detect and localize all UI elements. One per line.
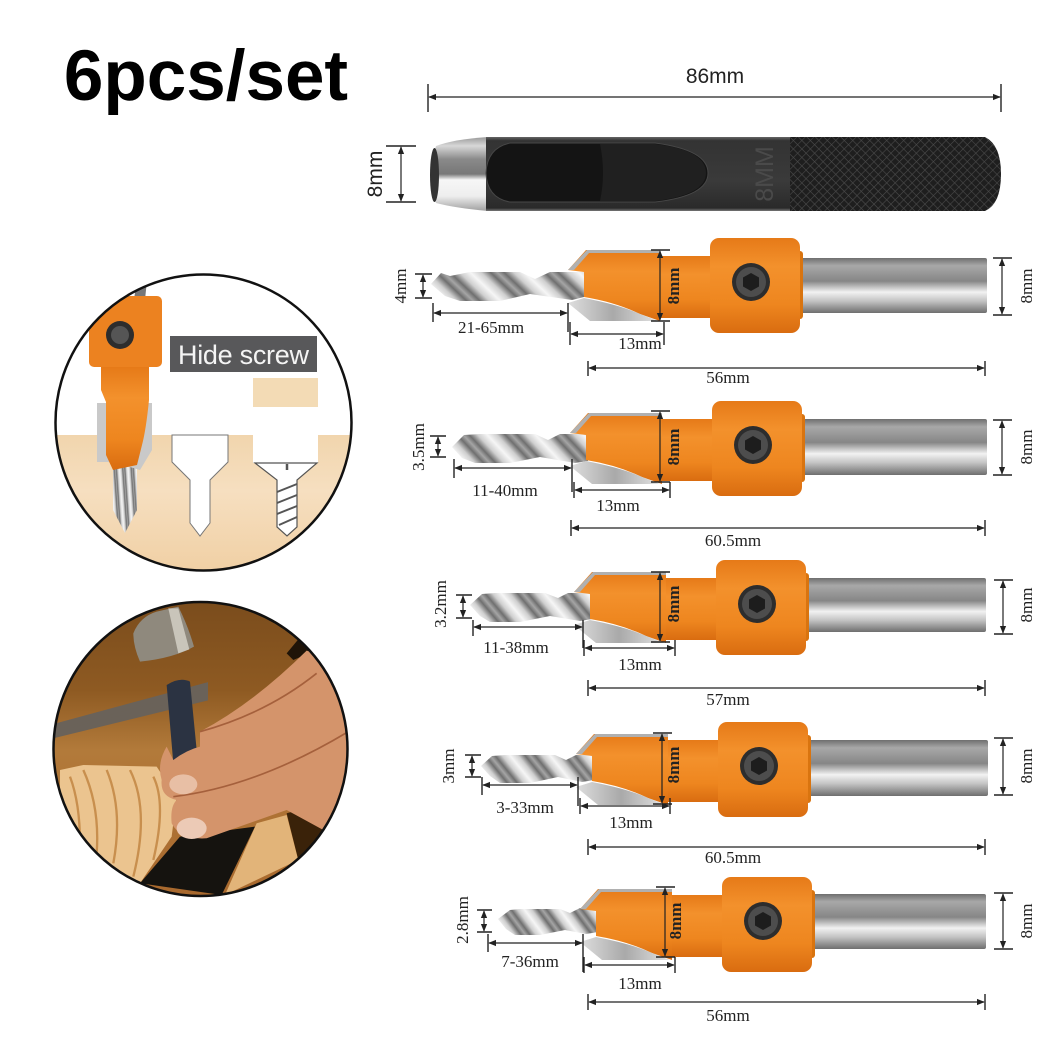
dimension: drill diameter 3mm xyxy=(439,749,481,783)
dimension: 13mm: 13mm xyxy=(596,496,640,515)
dimension: 8mm head xyxy=(651,250,683,321)
dimension: 8mm shank: 8mm xyxy=(1017,430,1036,464)
dimension: 13mm: 13mm xyxy=(618,974,662,993)
dimension: 3-33mm: 3-33mm xyxy=(496,798,554,817)
dimension: 11-40mm: 11-40mm xyxy=(472,481,538,500)
cutter head xyxy=(574,560,809,655)
dimension: 8mm head xyxy=(651,411,683,482)
dimension: 7-36mm: 7-36mm xyxy=(501,952,559,971)
photo background xyxy=(54,603,300,895)
wood board xyxy=(50,435,360,575)
countersink bit in use xyxy=(89,270,162,533)
punch knurled grip xyxy=(790,137,1001,211)
wood block xyxy=(60,765,177,883)
wood grain xyxy=(70,770,160,877)
label: hide screw: Hide screw xyxy=(178,340,310,370)
dimension: 13mm xyxy=(580,798,670,832)
dimension: 8mm shank: 8mm xyxy=(1017,904,1036,938)
hand xyxy=(160,651,348,838)
drill xyxy=(452,434,588,463)
dimension: drill diameter 4mm: 4mm xyxy=(391,269,410,303)
dimension: 21-65mm xyxy=(433,303,568,337)
dimension: 57mm: 57mm xyxy=(706,690,750,709)
bit 1: 4mm xyxy=(391,238,1036,387)
finger crease xyxy=(173,673,348,797)
dimension: 60.5mm xyxy=(571,520,985,550)
dimension: 3-33mm xyxy=(482,777,578,817)
punch shaft xyxy=(167,680,197,763)
countersunk hole xyxy=(172,435,228,536)
dimension: punch diameter 8mm xyxy=(364,146,416,202)
dimension: 13mm xyxy=(584,957,675,993)
cutter head xyxy=(576,722,811,817)
dimension: 8mm shank: 8mm xyxy=(1017,269,1036,303)
screw xyxy=(255,463,317,536)
panel: hide screw diagram xyxy=(50,270,360,575)
dimension: 13mm: 13mm xyxy=(609,813,653,832)
circle outline xyxy=(54,602,348,896)
cutter head xyxy=(580,877,815,972)
dimension: 56mm xyxy=(588,361,985,387)
wood plug xyxy=(253,378,318,407)
dimension: drill diameter 2.8mm xyxy=(453,896,492,944)
dimension: 8mm head: 8mm xyxy=(664,586,683,622)
punch tool with dimensions xyxy=(364,65,1001,211)
dimension: drill diameter 4mm xyxy=(391,269,432,303)
drill xyxy=(431,272,584,301)
dimension: 60.5mm xyxy=(588,839,985,867)
black base xyxy=(140,827,255,895)
bit 4: 3mm xyxy=(439,722,1036,867)
recess above screw xyxy=(253,434,318,463)
cutter head xyxy=(570,401,805,496)
panel: hammer and punch photo xyxy=(50,600,352,900)
shank xyxy=(805,578,986,632)
dimension: 8mm shank: 8mm xyxy=(1017,749,1036,783)
dimension: 8mm head xyxy=(653,733,683,804)
cutter head xyxy=(568,238,803,333)
dimension: 8mm shank: 8mm xyxy=(1017,588,1036,622)
dark gap xyxy=(286,812,322,858)
punch slot xyxy=(486,143,708,202)
dimension: 13mm: 13mm xyxy=(618,655,662,674)
dimension: 13mm xyxy=(574,482,670,515)
dimension: 8mm head xyxy=(656,887,685,957)
dimension: drill diameter 3.2mm: 3.2mm xyxy=(431,580,450,628)
dimension: punch diameter 8mm: 8mm xyxy=(364,151,387,197)
bit 3: 3.2mm xyxy=(431,560,1036,709)
right wood piece xyxy=(225,815,298,895)
dimension: 8mm shank xyxy=(994,580,1036,634)
dimension: 8mm head: 8mm xyxy=(664,747,683,783)
dimension: 60.5mm: 60.5mm xyxy=(705,531,761,550)
hammer highlight xyxy=(168,608,189,653)
dimension: 56mm xyxy=(588,994,985,1025)
dimension: 8mm shank xyxy=(994,893,1036,949)
shank xyxy=(801,258,987,313)
dimension: 8mm shank xyxy=(993,420,1036,475)
circle outline xyxy=(56,274,352,570)
dimension: drill diameter 3.2mm xyxy=(431,580,472,628)
dimension: 11-38mm xyxy=(473,620,583,657)
shank xyxy=(803,419,987,475)
title: 6pcs/set xyxy=(64,37,348,116)
dimension: drill diameter 3.5mm: 3.5mm xyxy=(409,423,428,471)
dimension: drill diameter 3.5mm xyxy=(409,423,446,471)
dimension: drill diameter 3mm: 3mm xyxy=(439,749,458,783)
dimension: 8mm shank xyxy=(993,258,1036,315)
shank xyxy=(805,740,988,796)
dimension: 8mm head: 8mm xyxy=(666,903,685,939)
fingernail index xyxy=(169,774,197,794)
dimension: 8mm head: 8mm xyxy=(664,429,683,465)
dimension: 13mm: 13mm xyxy=(618,334,662,353)
dimension: 21-65mm: 21-65mm xyxy=(458,318,524,337)
dimension: 60.5mm: 60.5mm xyxy=(705,848,761,867)
dimension: 56mm: 56mm xyxy=(706,1006,750,1025)
dimension: 8mm head: 8mm xyxy=(664,268,683,304)
punch black body xyxy=(486,137,792,211)
bit 5: 2.8mm xyxy=(453,877,1036,1025)
punch slot inner part xyxy=(600,144,706,201)
dimension: 86mm xyxy=(428,65,1001,112)
dimension: 11-40mm xyxy=(454,459,572,500)
dimension: 8mm head xyxy=(651,572,683,642)
dimension: 13mm xyxy=(570,322,664,353)
tool band in background xyxy=(50,686,205,735)
shank xyxy=(807,894,986,949)
drill xyxy=(498,908,598,935)
fingernail thumb xyxy=(177,818,207,839)
dimension: 56mm: 56mm xyxy=(706,368,750,387)
hammer head xyxy=(133,607,194,662)
dimension: 13mm xyxy=(584,640,675,674)
engraved size mark: 8MM xyxy=(751,146,779,202)
drill xyxy=(481,755,594,783)
dimension: 57mm xyxy=(588,680,985,709)
dimension: 7-36mm xyxy=(488,934,583,972)
punch steel tip xyxy=(431,137,488,211)
drill xyxy=(470,593,592,622)
dimension: 86mm: 86mm xyxy=(686,65,744,88)
dimension: 11-38mm: 11-38mm xyxy=(483,638,549,657)
punch tip opening xyxy=(430,148,439,202)
dimension: 8mm shank xyxy=(994,738,1036,795)
dimension: drill diameter 2.8mm: 2.8mm xyxy=(453,896,472,944)
dark corner top right xyxy=(286,640,309,660)
bit 2: 3.5mm xyxy=(409,401,1036,550)
